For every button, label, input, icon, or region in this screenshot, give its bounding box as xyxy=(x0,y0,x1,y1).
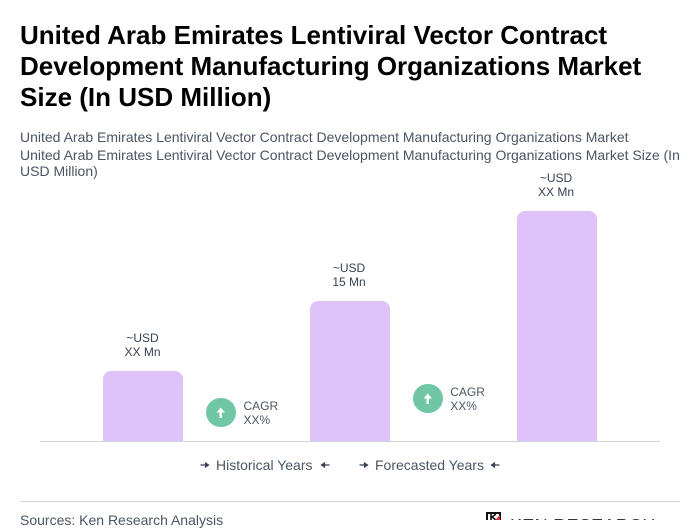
footer divider xyxy=(20,501,680,502)
bar 1 label xyxy=(124,331,160,359)
icon: up arrow 1 xyxy=(206,398,236,427)
legend: forecasted years: Forecasted Years xyxy=(375,457,484,473)
bar 2 xyxy=(310,301,390,441)
icon: up arrow 2 xyxy=(413,384,442,413)
CAGR text 1 xyxy=(244,399,278,427)
CAGR text 1: CAGR xyxy=(244,399,278,413)
logo mark xyxy=(486,512,501,520)
CAGR badge 1 xyxy=(206,398,278,427)
bar 3 label xyxy=(538,171,574,199)
logo xyxy=(486,512,656,520)
axis line xyxy=(40,441,660,442)
CAGR text 1: XX% xyxy=(244,413,270,427)
CAGR badge 2 xyxy=(413,384,485,413)
bar 2 label: 15 Mn xyxy=(332,275,366,289)
bar 2 label: ~USD xyxy=(333,261,365,275)
bar 3 label: ~USD xyxy=(540,171,572,185)
bar 3 xyxy=(517,211,597,441)
chart description: United Arab Emirates Lentiviral Vector Contract Development Manufacturing Organizations Market Size (In USD Million) xyxy=(20,147,680,179)
bar 1 label: XX Mn xyxy=(124,345,160,359)
legend: historical years: Historical Years xyxy=(216,457,312,473)
bar 3 label: XX Mn xyxy=(538,185,574,199)
title: United Arab Emirates Lentiviral Vector Contract Development Manufacturing Organizations Market Size (In USD Million) xyxy=(20,20,641,112)
source text: Sources: Ken Research Analysis xyxy=(20,512,223,528)
CAGR text 2: CAGR xyxy=(450,385,485,399)
bar 1 xyxy=(103,371,183,441)
CAGR text 2 xyxy=(450,385,485,413)
bar chart xyxy=(40,171,660,442)
CAGR text 2: XX% xyxy=(450,399,477,413)
bar 1 label: ~USD xyxy=(126,331,159,345)
bar 2 label xyxy=(332,261,366,289)
subtitle: United Arab Emirates Lentiviral Vector Contract Development Manufacturing Organizations Market xyxy=(20,129,629,145)
